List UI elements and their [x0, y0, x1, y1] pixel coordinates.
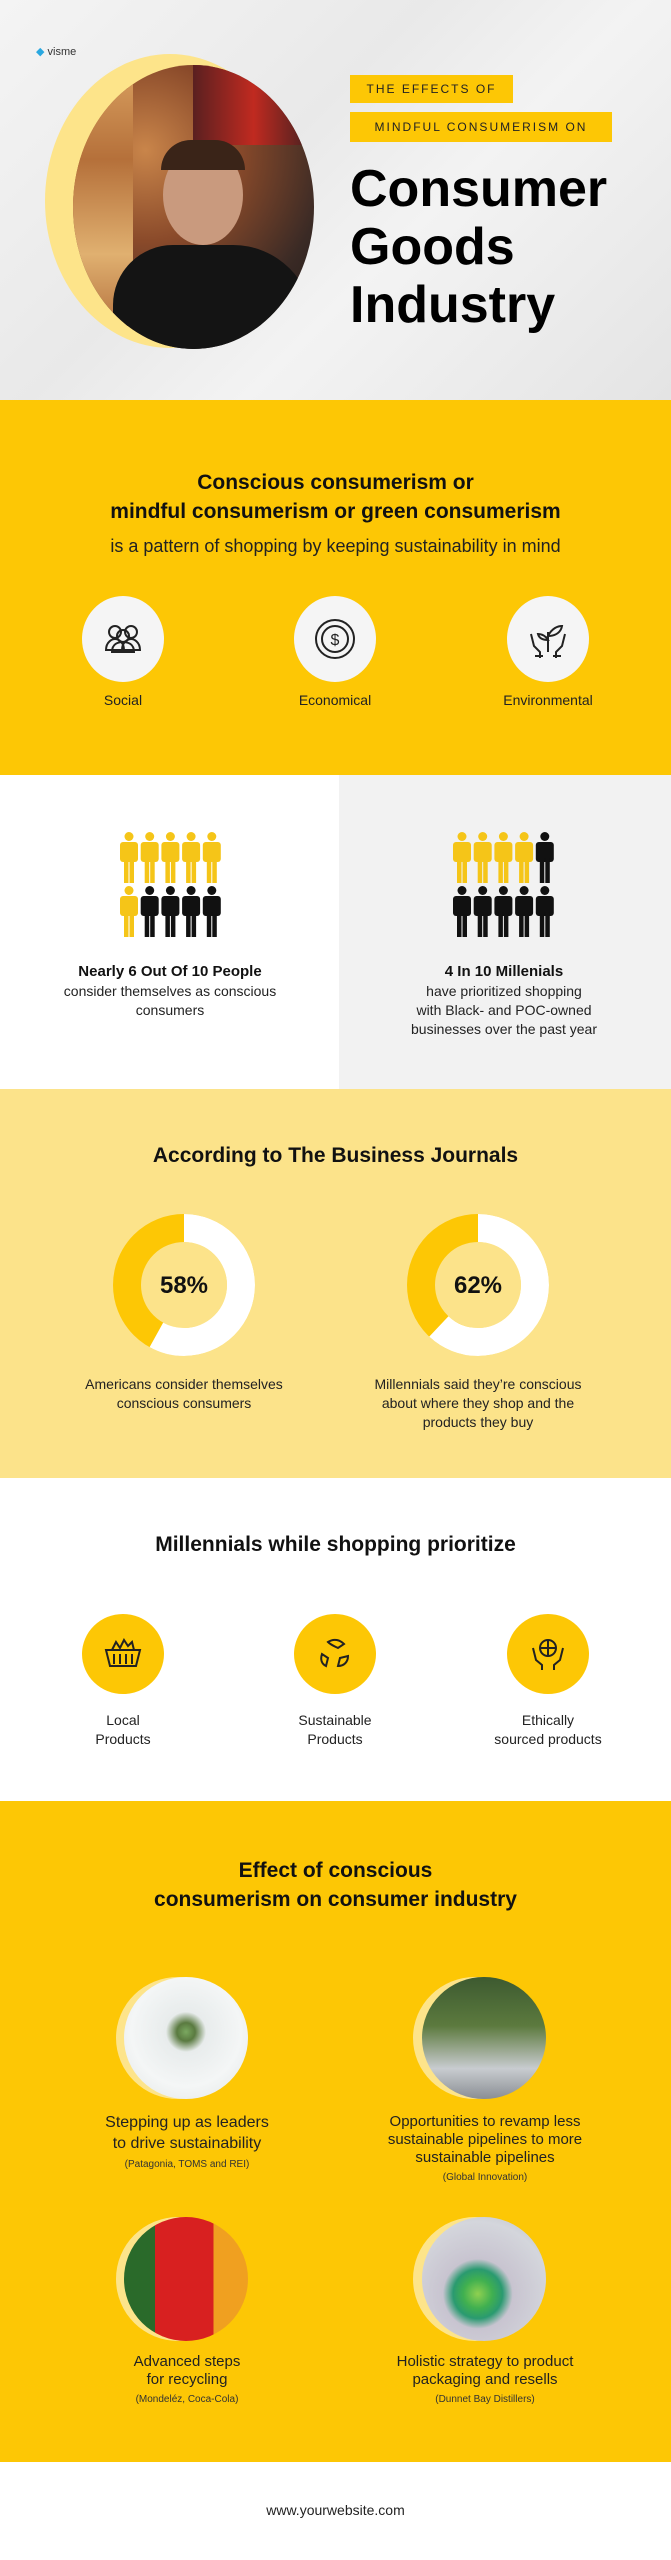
icon: ethically sourced — [507, 1614, 589, 1694]
label: sustainable — [298, 1712, 372, 1747]
text: millennials conscious — [374, 1376, 582, 1430]
item: leaders: Stepping up as leaders — [105, 2114, 269, 2131]
title: Industry — [350, 276, 555, 334]
panel: business journals — [0, 1089, 671, 1478]
item: packaging: Holistic strategy to product — [397, 2353, 573, 2370]
item: recycling: for recycling — [147, 2371, 227, 2388]
heading: mindful consumerism or green consumerism — [110, 500, 561, 523]
panel: effect on industry — [0, 1801, 671, 2462]
logo: visme: ◆ visme — [36, 46, 76, 58]
text: americans: conscious consumers — [117, 1395, 251, 1411]
text: nearly 6 of 10: consumers — [136, 1002, 204, 1018]
label: sustainable: Sustainable — [298, 1712, 372, 1728]
panel: millennials prioritize — [0, 1478, 671, 1801]
icon: social — [82, 596, 164, 682]
photo: green bottle — [422, 2217, 546, 2341]
text: millennials conscious: products they buy — [423, 1414, 533, 1430]
heading: Millennials while shopping prioritize — [155, 1533, 516, 1556]
item: pipelines: (Global Innovation) — [443, 2172, 527, 2183]
label: social: Social — [104, 692, 142, 708]
title: Consumer — [350, 160, 607, 218]
text: millennials conscious: about where they shop and the — [382, 1395, 574, 1411]
icon: environmental — [507, 596, 589, 682]
donut: 62%: 62% — [454, 1272, 502, 1299]
item: leaders: to drive sustainability — [113, 2135, 261, 2152]
donut: 62% — [407, 1214, 549, 1356]
item: leaders: (Patagonia, TOMS and REI) — [125, 2159, 249, 2170]
crescent yellow circle — [45, 54, 295, 348]
text: nearly 6 of 10 — [64, 963, 276, 1018]
photo: woman in store — [73, 65, 314, 349]
label: local: Local — [106, 1712, 140, 1728]
label: ethically — [494, 1712, 602, 1747]
heading: Effect of conscious — [239, 1859, 432, 1882]
label: mindful consumerism on: MINDFUL CONSUMERISM ON — [375, 120, 587, 134]
panel: stats — [0, 775, 671, 1089]
item: packaging: packaging and resells — [412, 2371, 558, 2388]
title: Goods — [350, 218, 515, 276]
item: packaging: (Dunnet Bay Distillers) — [435, 2394, 535, 2405]
photo: hand with plant — [124, 1977, 248, 2099]
item: pipelines: sustainable pipelines to more — [388, 2131, 582, 2148]
text: 4 in 10: 4 In 10 Millenials — [445, 963, 563, 980]
item: recycling — [116, 2217, 248, 2405]
icon: sustainable — [294, 1614, 376, 1694]
icon: people 4 of 10 — [453, 832, 554, 937]
label: mindful consumerism on — [350, 112, 612, 142]
heading: consumerism on consumer industry — [154, 1888, 517, 1911]
label: ethically: sourced products — [494, 1731, 602, 1747]
item: recycling: Advanced steps — [134, 2353, 240, 2370]
item: packaging — [397, 2217, 574, 2405]
text: americans — [85, 1376, 283, 1411]
label: local: Products — [95, 1731, 151, 1747]
icon: economical: $ — [331, 632, 340, 649]
heading: Conscious consumerism or — [197, 471, 474, 494]
item: leaders — [105, 1977, 269, 2170]
label: environmental: Environmental — [503, 692, 593, 708]
icon: people 6 of 10 — [120, 832, 221, 937]
panel: definition — [0, 400, 671, 775]
text: nearly 6 of 10: Nearly 6 Out Of 10 People — [78, 963, 262, 980]
label: the effects of — [350, 75, 513, 103]
label: sustainable: Products — [307, 1731, 363, 1747]
label: the effects of: THE EFFECTS OF — [366, 82, 496, 96]
item: pipelines: Opportunities to revamp less — [390, 2113, 580, 2130]
photo: pipelines — [422, 1977, 546, 2099]
text: nearly 6 of 10: consider themselves as conscious — [64, 983, 276, 999]
label: local — [95, 1712, 151, 1747]
text: 4 in 10 — [411, 963, 597, 1037]
donut: 58%: 58% — [160, 1272, 208, 1299]
panel: hero — [0, 0, 671, 400]
donut: 58% — [113, 1214, 255, 1356]
text: 4 in 10: with Black- and POC-owned — [416, 1002, 592, 1018]
title — [350, 160, 607, 334]
photo: recycling bins — [124, 2217, 248, 2341]
label: ethically: Ethically — [522, 1712, 574, 1728]
text: 4 in 10: businesses over the past year — [411, 1021, 597, 1037]
footer: website: www.yourwebsite.com — [266, 2502, 405, 2518]
heading — [154, 1859, 517, 1911]
item: recycling: (Mondeléz, Coca-Cola) — [136, 2394, 238, 2405]
heading — [110, 471, 561, 523]
label: economical: Economical — [299, 692, 371, 708]
text: millennials conscious: Millennials said they’re conscious — [374, 1376, 582, 1392]
subtitle: is a pattern of shopping by keeping sustainability in mind — [110, 536, 561, 556]
item: pipelines — [388, 1977, 582, 2183]
text: americans: Americans consider themselves — [85, 1376, 283, 1392]
item: pipelines: sustainable pipelines — [415, 2149, 555, 2166]
heading: According to The Business Journals — [153, 1144, 518, 1167]
text: 4 in 10: have prioritized shopping — [426, 983, 582, 999]
icon: local products — [82, 1614, 164, 1694]
icon: economical — [294, 596, 376, 682]
